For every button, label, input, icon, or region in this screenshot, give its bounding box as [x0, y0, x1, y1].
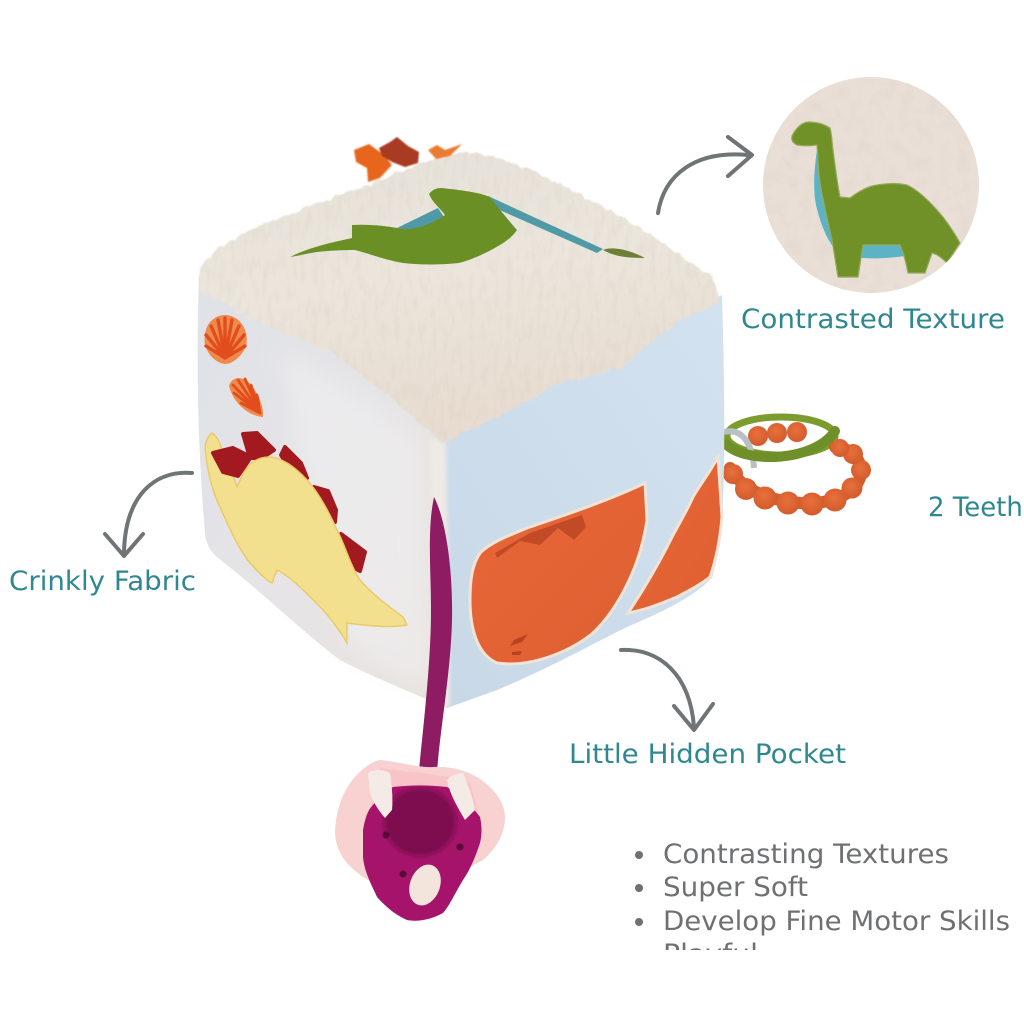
- nose horn: [404, 860, 446, 910]
- face shadow: [384, 788, 456, 856]
- cube top fur face: [190, 145, 730, 445]
- cube left face: [198, 275, 447, 708]
- orange bead ring: [723, 439, 871, 516]
- cube right face: [438, 295, 724, 708]
- cube edge shading: [430, 440, 450, 708]
- fur strand texture: [252, 230, 253, 231]
- top dinosaur appliqué: [290, 188, 645, 264]
- inset: fur texture close-up: [760, 75, 982, 295]
- eyes: [382, 832, 464, 878]
- inset fur texture: [760, 75, 982, 295]
- left pocket: [470, 483, 647, 664]
- arrow: to contrasted texture: [658, 137, 752, 213]
- back beads: [748, 422, 807, 446]
- triceratops rattle head: [335, 760, 505, 921]
- feature bullet list: [635, 842, 1009, 950]
- green ring back: [727, 417, 835, 455]
- product: plush dinosaur activity cube: [190, 137, 730, 921]
- pocket stitch marks: [510, 634, 528, 655]
- label: crinkly fabric: Crinkly Fabric: [9, 566, 196, 597]
- shell icons: [205, 315, 263, 417]
- label: little hidden pocket: Little Hidden Pocket: [569, 739, 846, 770]
- feature bullet list: Develop Fine Motor Skills: [663, 906, 1010, 937]
- grey loop: [724, 431, 754, 468]
- face: [363, 786, 482, 921]
- arrow: to crinkly fabric: [105, 473, 192, 556]
- horns: [368, 770, 392, 818]
- right pocket: [628, 457, 722, 613]
- soft highlight on left face: [280, 345, 430, 690]
- stegosaurus appliqué: [205, 433, 407, 643]
- inset dinosaur: [792, 122, 960, 277]
- pocket dark zigzag trim: [495, 515, 586, 558]
- frill: [335, 760, 505, 884]
- feature bullet list: Playful: [663, 939, 758, 970]
- feature bullet list: Contrasting Textures: [663, 839, 949, 870]
- magenta tail ribbon: [419, 497, 452, 772]
- arrow: to hidden pocket: [621, 650, 713, 730]
- label: contrasted texture: Contrasted Texture: [741, 304, 1005, 335]
- green ring front: [726, 431, 835, 457]
- stegosaurus neck plate: [213, 448, 251, 476]
- stegosaurus rear plates: [243, 433, 365, 571]
- teether rings: [723, 417, 871, 516]
- inset dinosaur blue lining: [814, 150, 905, 258]
- orange ribbon tags: [354, 137, 462, 182]
- feature bullet list: Super Soft: [663, 872, 808, 903]
